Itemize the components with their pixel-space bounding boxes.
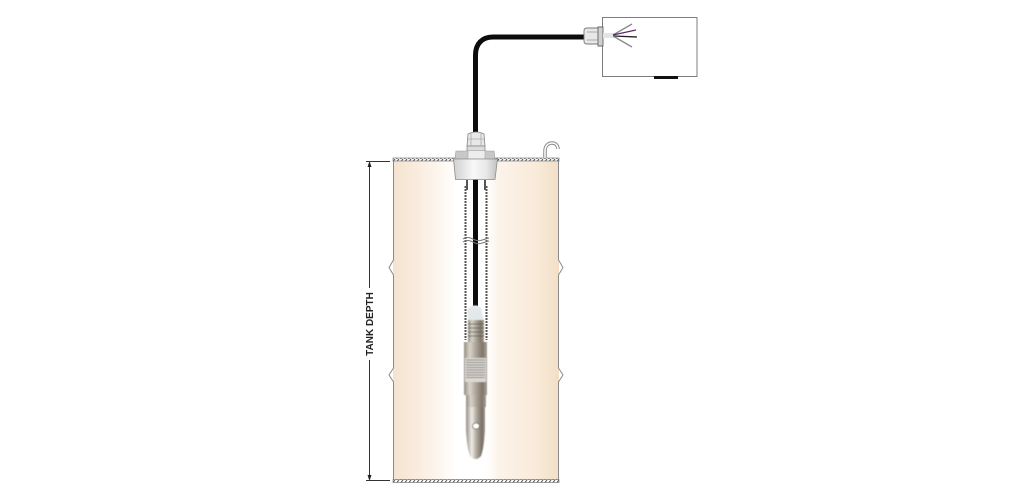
- nose cone: [466, 407, 485, 459]
- tank right wall: [558, 161, 563, 480]
- hex collar: [466, 395, 486, 407]
- hex nut: [455, 151, 495, 159]
- dimension label: TANK DEPTH: [365, 292, 376, 356]
- wire sheath: [603, 33, 615, 38]
- suspension cable: [476, 37, 586, 306]
- tank top plate: [393, 158, 559, 161]
- tank: [389, 158, 563, 482]
- tank left wall: [389, 161, 394, 480]
- screen break line: [463, 237, 489, 241]
- box outline: [602, 18, 697, 76]
- mounting bar: [654, 76, 678, 79]
- tank bottom plate: [393, 480, 559, 482]
- tank depth dimension: [365, 161, 390, 481]
- probe: [464, 305, 487, 459]
- screen brackets: [467, 180, 485, 190]
- junction box: [584, 18, 697, 79]
- cable gland side: [584, 28, 598, 44]
- cable gland: [467, 132, 485, 146]
- stilling screen: [463, 180, 489, 340]
- vent hook: [545, 143, 558, 158]
- probe label: [465, 358, 486, 382]
- cross hole: [472, 423, 480, 429]
- conductors: [613, 24, 632, 35]
- head body: [454, 159, 498, 180]
- tank body: [393, 161, 559, 480]
- threaded section: [468, 320, 484, 342]
- dimension arrowheads: [368, 161, 372, 481]
- probe body: [464, 342, 487, 395]
- tank head fitting: [454, 132, 498, 180]
- strain relief: [467, 305, 484, 321]
- dimension line: [366, 162, 390, 480]
